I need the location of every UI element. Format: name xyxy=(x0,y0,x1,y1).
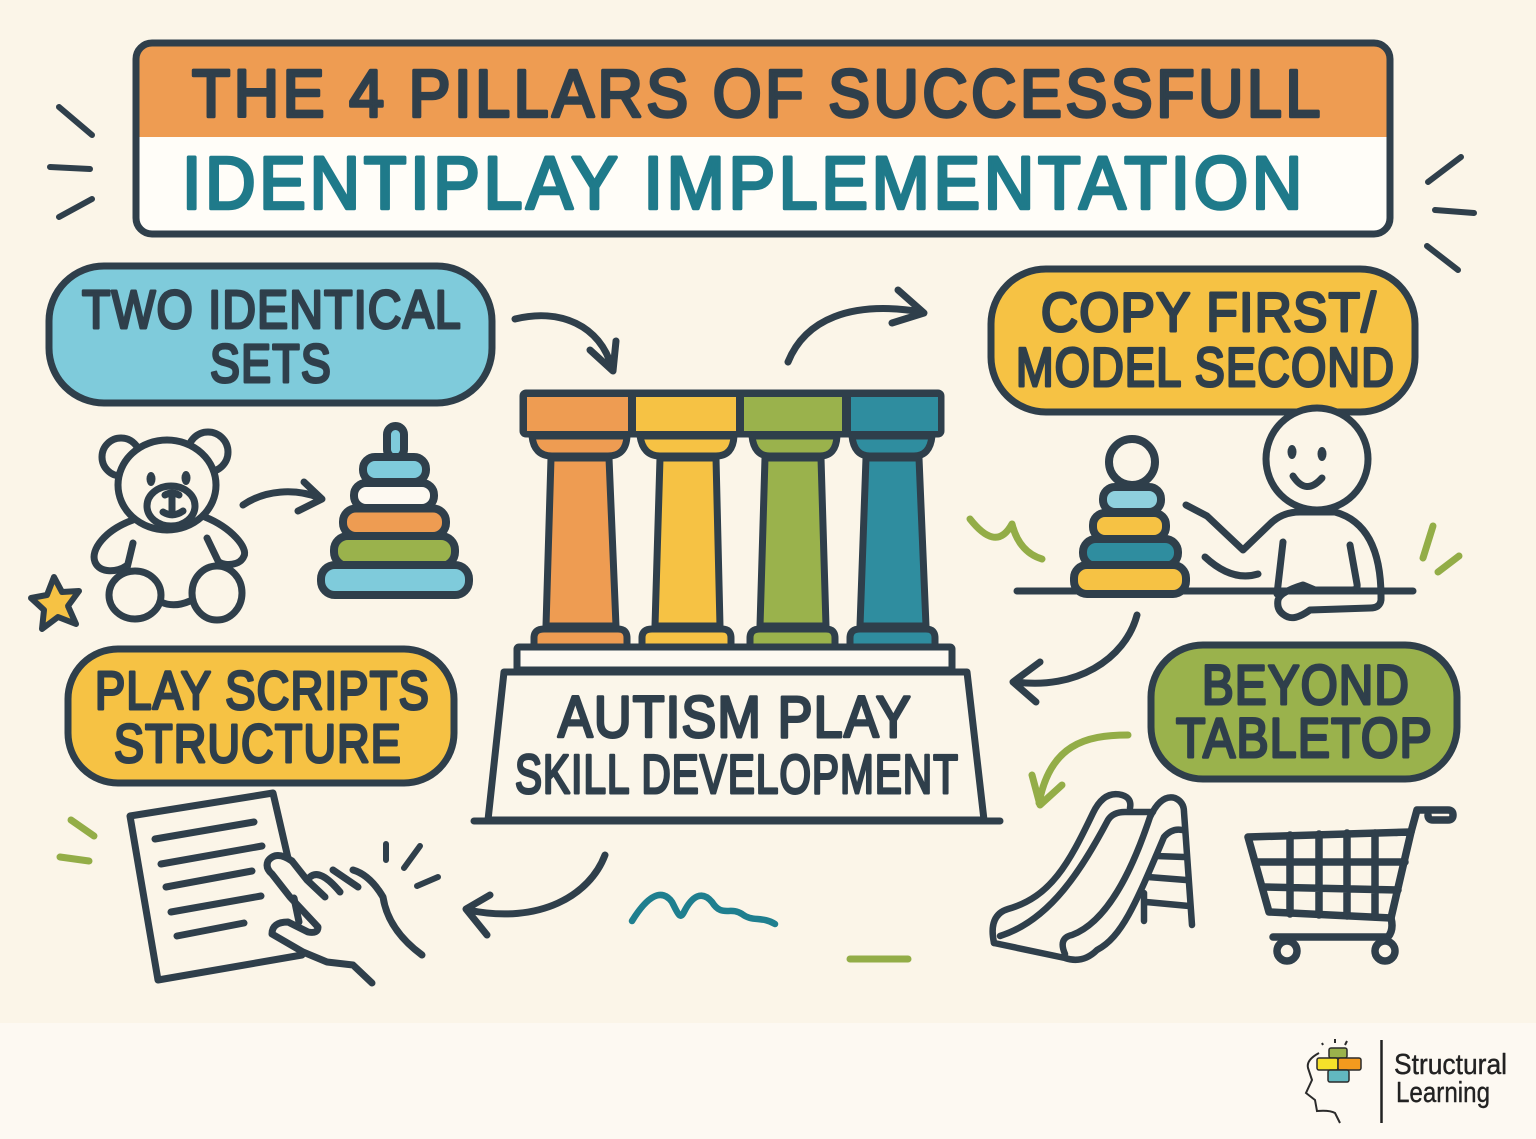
pillar: teal xyxy=(850,436,935,648)
logo head and blocks xyxy=(1306,1039,1361,1123)
pillar label: play scripts structure xyxy=(68,649,454,783)
logo wordmark: Structural xyxy=(1394,1049,1507,1081)
pillar label: copy first, model second: MODEL SECOND xyxy=(1016,336,1395,398)
decorative sparks left of title xyxy=(50,107,92,217)
pillar label: two identical sets: TWO IDENTICAL xyxy=(82,280,462,340)
icon: playground slide xyxy=(993,794,1192,960)
title banner: THE 4 PILLARS OF SUCCESSFULL xyxy=(192,56,1324,132)
icon: teddy bear xyxy=(94,432,245,620)
icon: pointing hand xyxy=(267,856,422,983)
arrow: bear to ring stack xyxy=(243,482,322,511)
logo wordmark xyxy=(1394,1049,1507,1109)
arrow: copy first to beyond tabletop xyxy=(1013,615,1137,702)
pillar label: copy first, model second: COPY FIRST/ xyxy=(1041,281,1377,343)
pedestal: SKILL DEVELOPMENT xyxy=(515,743,959,805)
arrow: pillars to copy first xyxy=(788,290,924,362)
icon: shopping cart xyxy=(1248,810,1453,961)
logo wordmark: Learning xyxy=(1396,1077,1490,1109)
pillar label: copy first, model second xyxy=(991,269,1415,412)
pillar: yellow xyxy=(640,436,734,648)
decorative sparks right of title xyxy=(1427,157,1474,270)
arrow: green to playground xyxy=(1032,735,1128,805)
pillar: orange xyxy=(532,436,627,648)
icon: ring stack, five rings xyxy=(321,426,469,595)
green motion marks left xyxy=(970,519,1042,559)
pillar label: play scripts structure: STRUCTURE xyxy=(114,714,402,774)
entablature xyxy=(523,393,941,434)
central pillars diagram xyxy=(474,393,1000,821)
pillar label: play scripts structure: PLAY SCRIPTS xyxy=(95,661,430,721)
title banner xyxy=(136,43,1390,234)
green motion marks right xyxy=(1423,526,1459,572)
pillar label: beyond tabletop: TABLETOP xyxy=(1176,706,1433,769)
green dash xyxy=(850,956,908,962)
logo: Structural Learning xyxy=(1306,1039,1507,1123)
pillar label: beyond tabletop: BEYOND xyxy=(1202,653,1410,716)
table line xyxy=(1017,588,1413,594)
arrow: pillars to scripts xyxy=(466,855,605,935)
green marks beside document xyxy=(60,820,94,861)
plinth xyxy=(517,647,952,670)
pedestal: AUTISM PLAY xyxy=(558,685,912,750)
arrow: sets to pillars xyxy=(515,316,616,371)
icon: script document xyxy=(130,793,302,980)
icon: ring stack with ball xyxy=(1074,439,1186,594)
pillar label: two identical sets: SETS xyxy=(210,334,332,394)
hand tap sparks xyxy=(386,844,438,886)
pillar label: beyond tabletop xyxy=(1151,645,1457,779)
teal squiggle xyxy=(632,895,775,924)
icon: star xyxy=(31,577,79,629)
pedestal xyxy=(474,672,1000,821)
title banner: IDENTIPLAY IMPLEMENTATION xyxy=(182,142,1306,224)
icon: smiling adult figure xyxy=(1186,408,1381,618)
footer band xyxy=(0,1023,1536,1139)
pillar label: two identical sets xyxy=(49,266,492,403)
pillar: green xyxy=(750,436,837,648)
